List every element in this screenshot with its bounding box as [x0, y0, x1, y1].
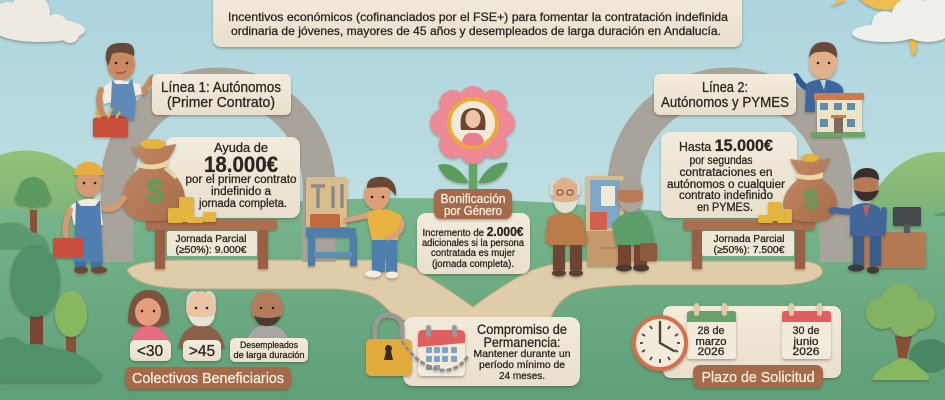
icon: money bag right	[783, 154, 837, 222]
icon: start date calendar	[687, 303, 736, 359]
tree: light green	[55, 291, 87, 359]
card	[663, 306, 841, 378]
tag: Desempleados de larga duración	[230, 338, 308, 362]
panel: incremento de 2.000€	[417, 213, 530, 274]
banner: Bonificación por Género	[434, 189, 512, 219]
panel: incremento de 2.000€: adicionales si la persona	[422, 238, 524, 249]
icon: end date calendar: 30 de	[792, 325, 820, 337]
icon: padlock with chain	[366, 315, 468, 376]
panel: incremento de 2.000€: (jornada completa).	[432, 259, 514, 270]
icon: building	[811, 93, 865, 137]
table: right	[683, 220, 815, 269]
panel: Hasta 15.000€: en PYMES.	[697, 202, 753, 214]
tree: tall	[10, 245, 60, 346]
icon: money bag right: $	[803, 184, 819, 215]
ground	[0, 198, 945, 400]
figure: older man in brown cardigan	[545, 178, 588, 276]
bush: dark right	[909, 339, 945, 373]
text: Compromiso de Permanencia: Mantener durante un	[474, 348, 571, 360]
text: Compromiso de Permanencia: 24 meses.	[499, 370, 545, 382]
tag: >45	[183, 340, 221, 361]
bush behind right desk	[925, 212, 945, 240]
cloud: top right	[852, 0, 945, 42]
panel: Ayuda de 18.000€: Ayuda de	[214, 141, 268, 155]
figure: boy in yellow shirt	[346, 177, 402, 278]
tag: <30: <30	[137, 343, 164, 360]
panel: Plazo de Solicitud	[634, 303, 841, 388]
bush: light right	[872, 358, 929, 380]
note: Jornada Parcial 9.000€: (≥50%): 9.000€	[176, 245, 247, 256]
panel: Ayuda de 18.000€	[165, 137, 300, 218]
card	[403, 317, 580, 386]
bust: bald man	[247, 291, 288, 340]
icon: start date calendar: marzo	[696, 336, 726, 348]
bust: woman under 30	[128, 290, 171, 345]
note: Jornada Parcial 7.500€	[702, 231, 794, 256]
sun	[830, 0, 922, 55]
hill: right	[862, 152, 945, 225]
hill: left	[0, 150, 100, 240]
banner: Colectivos Beneficiarios: Colectivos Beneficiarios	[132, 371, 284, 387]
icon: end date calendar: junio	[792, 336, 818, 348]
panel: Ayuda de 18.000€: jornada completa.	[198, 198, 287, 210]
figure: worker with helmet	[53, 162, 124, 274]
bust: man over 45	[178, 291, 225, 348]
text: Compromiso de Permanencia: período mínimo de	[479, 359, 565, 371]
figure: older man in green sweater	[612, 178, 657, 272]
tag: Desempleados de larga duración: de larga duración	[234, 350, 304, 361]
panel: incremento de 2.000€: contratada es mujer	[431, 248, 516, 259]
note: Jornada Parcial 9.000€: Jornada Parcial	[176, 234, 246, 245]
figure: worker on top of left arch	[93, 43, 152, 137]
icon: coins left	[168, 197, 216, 223]
icon: money bag left	[122, 139, 185, 221]
tree: small left	[15, 177, 51, 233]
note: Jornada Parcial 7.500€: Jornada Parcial	[714, 234, 784, 245]
workbench	[306, 177, 357, 266]
panel: Hasta 15.000€: autónomos o cualquier	[667, 179, 785, 191]
tag: Desempleados de larga duración: Desempleados	[240, 340, 298, 351]
icon: toolbox	[53, 238, 84, 258]
banner: Plazo de Solicitud: Plazo de Solicitud	[702, 370, 814, 386]
icon: calendar	[418, 325, 465, 376]
arch: right	[624, 84, 836, 262]
panel: Ayuda de 18.000€: 18.000€	[204, 152, 278, 177]
label: Línea 1	[152, 74, 291, 115]
banner: Colectivos Beneficiarios	[125, 367, 291, 389]
label: Línea 1: (Primer Contrato)	[167, 95, 275, 111]
panel: Ayuda de 18.000€: indefinido a	[211, 186, 272, 198]
icon: start date calendar: 2026	[698, 346, 724, 358]
tag: <30	[130, 340, 171, 361]
tag: >45: >45	[189, 343, 215, 360]
text: Compromiso de Permanencia: Permanencia:	[484, 335, 560, 350]
figure: businessman on top of right arch	[796, 42, 865, 137]
bush: bottom left	[0, 337, 102, 382]
panel: Hasta 15.000€: Hasta 15.000€	[679, 136, 774, 155]
panel: Compromiso de Permanencia	[366, 315, 580, 386]
tree: right	[866, 283, 935, 362]
group: Colectivos Beneficiarios	[125, 290, 308, 389]
label: Línea 1: Línea 1: Autónomos	[161, 80, 281, 96]
banner: Bonificación por Género: Bonificación	[440, 192, 506, 206]
panel: Hasta 15.000€: contrataciones en	[680, 167, 772, 179]
banner: Plazo de Solicitud	[693, 365, 823, 388]
icon: start date calendar: 28 de	[698, 325, 724, 337]
text: Compromiso de Permanencia: Compromiso de	[477, 322, 567, 337]
panel: Ayuda de 18.000€: por el primer contrato	[186, 174, 296, 186]
title banner: ordinaria de jóvenes, mayores de 45 años y desempleados de larga duración en Andalucía.	[231, 24, 721, 38]
icon: red toolbox	[93, 108, 128, 137]
text: Compromiso de Permanencia	[474, 322, 571, 382]
path: sand road	[127, 260, 822, 320]
icon: clock	[634, 317, 686, 369]
panel: incremento de 2.000€: Incremento de 2.000€	[422, 225, 524, 239]
arch: left	[117, 84, 319, 262]
label: Línea 2: Autónomos y PYMES	[661, 95, 789, 111]
icon: coins right	[758, 202, 792, 223]
icon: flower with woman portrait	[430, 86, 515, 193]
title banner: Incentivos económicos (cofinanciados por el FSE+) para fomentar la contratación indefinida	[228, 10, 728, 24]
icon: end date calendar	[782, 303, 831, 359]
office cabinet	[586, 176, 629, 266]
panel: Hasta 15.000€	[661, 132, 797, 218]
panel: Hasta 15.000€: por segundas	[690, 155, 753, 167]
icon: briefcase	[640, 243, 657, 261]
panel: Hasta 15.000€: contrato indefinido	[679, 190, 773, 202]
icon: end date calendar: 2026	[792, 346, 820, 358]
banner: Bonificación por Género: por Género	[444, 204, 502, 218]
label: Línea 2: Línea 2:	[702, 80, 748, 96]
note: Jornada Parcial 7.500€: (≥50%): 7.500€	[714, 245, 785, 256]
title banner	[213, 0, 742, 47]
bush: left	[0, 222, 50, 250]
figure: bearded businessman	[832, 168, 885, 274]
label: Línea 2	[654, 74, 796, 115]
table: left	[146, 219, 277, 269]
cloud: top left	[0, 0, 85, 43]
note: Jornada Parcial 9.000€	[167, 231, 257, 256]
icon: money bag left: $	[146, 172, 164, 209]
desk with monitor	[864, 207, 926, 268]
